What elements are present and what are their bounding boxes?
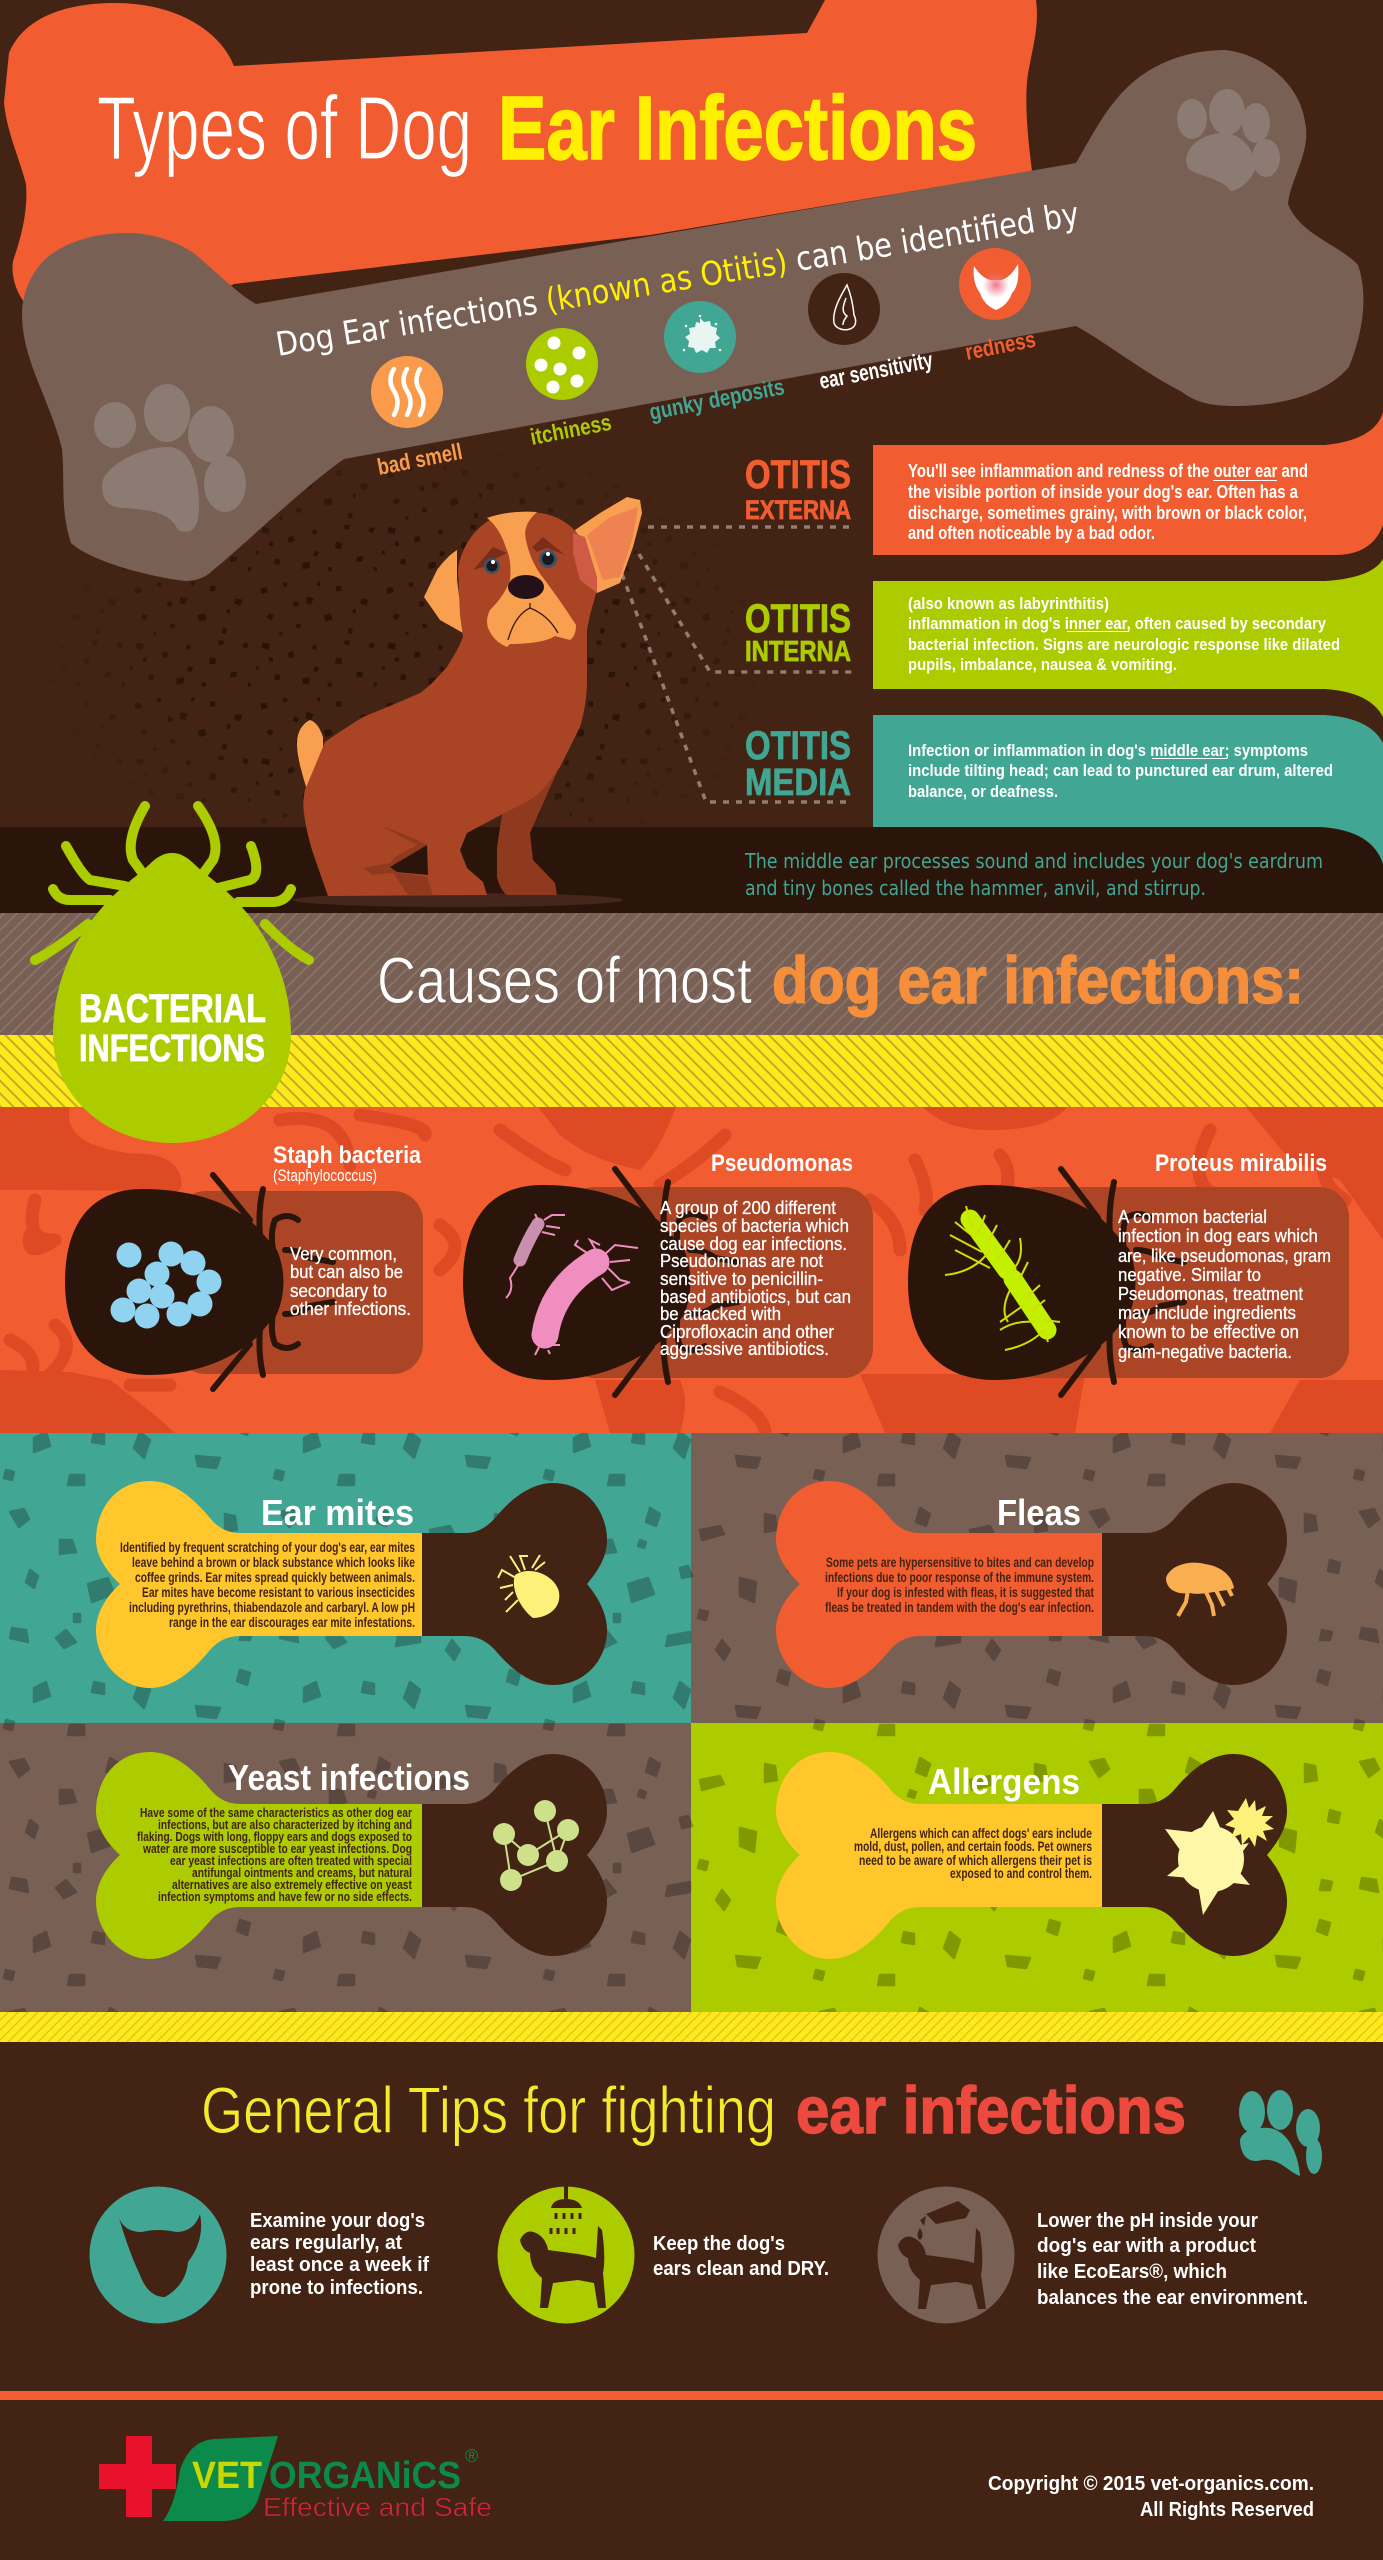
bacteria card: pseudomonas: species of bacteria which <box>660 1216 849 1236</box>
bacteria card: pseudomonas: A group of 200 different <box>660 1198 836 1218</box>
panel: ear mites: range in the ear discourages ear mite infestations. <box>169 1614 415 1630</box>
bacteria card: proteus mirabilis: Pseudomonas, treatment <box>1118 1284 1303 1304</box>
causes heading: Causes of most <box>377 943 752 1017</box>
panel: ear mites: Identified by frequent scratching of your dog's ear, ear mites <box>120 1539 415 1555</box>
bacteria card: staph: secondary to <box>290 1281 387 1301</box>
bacteria card: pseudomonas: Pseudomonas are not <box>660 1251 823 1271</box>
tick legs: proteus <box>1061 1169 1184 1395</box>
otitis media label <box>745 724 851 804</box>
symptom labels: bad smell <box>375 438 464 480</box>
panel: fleas: infections due to poor response of the immune system. <box>825 1569 1094 1585</box>
speckled background around dog <box>86 466 730 825</box>
panel: allergens: Allergens <box>928 1761 1080 1802</box>
bacteria card: proteus mirabilis: Proteus mirabilis <box>1155 1150 1327 1177</box>
panel: otitis media background <box>873 715 1383 870</box>
panel: fleas: If your dog is infested with fleas, it is suggested that <box>837 1584 1094 1600</box>
panel: ear mites: including pyrethrins, thiabendazole and carbaryl. A low pH <box>129 1599 415 1615</box>
panel: bacterial causes <box>0 1107 1383 1433</box>
tick legs: staph <box>213 1175 333 1389</box>
panel: allergens: exposed to and control them. <box>950 1865 1092 1881</box>
dotted leader lines <box>622 527 855 802</box>
background tick silhouettes <box>0 1107 1383 1433</box>
bacteria card: pseudomonas: aggressive antibiotics. <box>660 1339 829 1359</box>
panel: otitis externa background <box>873 412 1383 555</box>
copyright: Copyright © 2015 vet-organics.com. <box>988 2473 1314 2495</box>
tip 2: clean and dry: ears clean and DRY. <box>653 2258 829 2280</box>
bacteria card: pseudomonas: sensitive to penicillin- <box>660 1269 823 1289</box>
logo: Vet Organics: ORGANiCS <box>269 2455 461 2497</box>
dog illustration <box>293 497 642 907</box>
tip 3: lower the pH: Lower the pH inside your <box>1037 2210 1258 2232</box>
tip 3: lower the pH: dog's ear with a product <box>1037 2235 1256 2257</box>
symptom labels <box>375 326 1038 480</box>
bacteria card: proteus mirabilis: known to be effective on <box>1118 1322 1299 1342</box>
title: Ear Infections <box>498 79 977 179</box>
otitis media text: include tilting head; can lead to punctured ear drum, altered <box>908 761 1333 780</box>
logo: Vet Organics <box>99 2436 492 2522</box>
bacteria card: staph: but can also be <box>290 1262 403 1282</box>
tip 1: examine ears <box>90 2186 429 2324</box>
otitis externa text <box>908 461 1308 543</box>
bacteria card: proteus mirabilis: infection in dog ears which <box>1118 1226 1318 1246</box>
icon: bad smell <box>371 356 443 428</box>
bacteria card: pseudomonas: Ciprofloxacin and other <box>660 1322 834 1342</box>
tip 1: examine ears: prone to infections. <box>250 2277 423 2299</box>
dark floor band <box>0 827 1383 913</box>
panel: fleas: fleas be treated in tandem with the dog's ear infection. <box>825 1599 1094 1615</box>
panel: yeast infections: Yeast infections <box>228 1757 470 1798</box>
bone subtitle: Dog Ear infections (known as Otitis) can be identified by <box>273 194 1082 364</box>
tip 3: lower the pH: like EcoEars®, which <box>1037 2261 1227 2283</box>
otitis externa text: the visible portion of inside your dog's ear. Often has a <box>908 482 1299 502</box>
otitis externa label <box>745 453 851 525</box>
bacteria card: pseudomonas: based antibiotics, but can <box>660 1287 851 1307</box>
grey bone <box>22 50 1363 581</box>
icon: gunky deposits <box>664 301 736 373</box>
otitis externa text: discharge, sometimes grainy, with brown or black color, <box>908 503 1307 523</box>
otitis externa text: You'll see inflammation and redness of the outer ear and <box>908 461 1308 481</box>
logo: Vet Organics: VET <box>192 2455 262 2497</box>
tip 1: examine ears: Examine your dog's <box>250 2210 425 2232</box>
tip 3: lower the pH <box>878 2186 1308 2324</box>
middle ear note: and tiny bones called the hammer, anvil, and stirrup. <box>745 876 1206 900</box>
tip 1: examine ears: least once a week if <box>250 2254 429 2276</box>
paw print left <box>94 384 246 532</box>
otitis externa label: EXTERNA <box>745 495 851 525</box>
bacteria card: proteus mirabilis: gram-negative bacteria. <box>1118 1342 1292 1362</box>
otitis media label: OTITIS <box>745 724 851 768</box>
icon: teal paw <box>1239 2090 1322 2176</box>
panel: yeast infections: antifungal ointments and creams, but natural <box>192 1865 412 1880</box>
panel: ear mites: Ear mites have become resistant to various insecticides <box>142 1584 415 1600</box>
yellow striped band lower <box>0 2012 1383 2042</box>
panel: yeast infections: ear yeast infections are often treated with special <box>170 1853 412 1868</box>
causes heading: dog ear infections: <box>772 943 1304 1017</box>
symptom labels: redness <box>963 326 1038 365</box>
tip 2: clean and dry <box>498 2186 829 2324</box>
bacteria card: proteus mirabilis: A common bacterial <box>1118 1207 1267 1227</box>
symptom labels: gunky deposits <box>647 373 786 425</box>
bacteria card: pseudomonas: cause dog ear infections. <box>660 1234 847 1254</box>
panel: fleas <box>691 1433 1383 1723</box>
panel: fleas: Fleas <box>997 1492 1081 1533</box>
icon: redness <box>959 248 1031 320</box>
otitis interna label: INTERNA <box>745 636 851 668</box>
bacteria card: staph <box>65 1142 423 1389</box>
logo: Vet Organics: Effective and Safe <box>263 2492 492 2522</box>
causes heading <box>377 943 1304 1017</box>
otitis interna text <box>908 594 1340 674</box>
tip 2: clean and dry: Keep the dog's <box>653 2233 785 2255</box>
copyright: All Rights Reserved <box>1140 2499 1314 2521</box>
logo: Vet Organics: ® <box>465 2446 478 2466</box>
panel: fleas: Some pets are hypersensitive to bites and can develop <box>826 1554 1094 1570</box>
bacteria card: pseudomonas: be attacked with <box>660 1304 781 1324</box>
bacteria card: staph: other infections. <box>290 1299 411 1319</box>
otitis interna text: pupils, imbalance, nausea & vomiting. <box>908 655 1177 674</box>
panel: yeast infections: alternatives are also extremely effective on yeast <box>172 1877 413 1892</box>
symptom labels: ear sensitivity <box>817 346 935 394</box>
paw print right <box>1177 89 1280 191</box>
causes heading band <box>0 913 1383 1035</box>
panel: yeast infections <box>0 1723 691 2012</box>
panel: ear mites: coffee grinds. Ear mites spread quickly between animals. <box>135 1569 415 1585</box>
tick legs: pseudomonas <box>615 1169 738 1395</box>
symptom labels: itchiness <box>528 409 613 450</box>
otitis externa label: OTITIS <box>745 453 851 497</box>
panel: ear mites <box>0 1433 691 1723</box>
panel: allergens: need to be aware of which allergens their pet is <box>859 1852 1092 1868</box>
otitis externa text: and often noticeable by a bad odor. <box>908 523 1155 543</box>
copyright <box>988 2473 1314 2521</box>
tips heading: ear infections <box>796 2073 1186 2147</box>
panel: allergens: Allergens which can affect dogs' ears include <box>870 1825 1092 1841</box>
bacteria card: pseudomonas <box>463 1150 873 1395</box>
title <box>97 79 977 179</box>
middle ear note <box>744 849 1323 900</box>
otitis media text <box>908 741 1333 801</box>
panel: allergens <box>691 1723 1383 2012</box>
yellow striped band <box>0 1035 1383 1107</box>
orange divider <box>0 2391 1383 2400</box>
otitis media text: balance, or deafness. <box>908 782 1058 801</box>
bacteria card: pseudomonas: Pseudomonas <box>711 1150 853 1177</box>
tip 3: lower the pH: balances the ear environment. <box>1037 2287 1308 2309</box>
otitis media label: MEDIA <box>745 762 851 804</box>
lime tick: bacterial infections <box>35 806 309 1143</box>
panel: yeast infections: water are more susceptible to ear yeast infections. Dog <box>142 1841 412 1856</box>
icon: ear sensitivity <box>808 273 880 345</box>
panel: allergens: mold, dust, pollen, and certain foods. Pet owners <box>854 1838 1092 1854</box>
bacteria card: staph: Very common, <box>290 1244 397 1264</box>
lime tick: bacterial infections: INFECTIONS <box>79 1028 265 1070</box>
panel: yeast infections: Have some of the same characteristics as other dog ear <box>140 1805 412 1820</box>
title: Types of Dog <box>97 79 472 179</box>
otitis interna text: (also known as labyrinthitis) <box>908 594 1109 613</box>
bacteria card: proteus mirabilis <box>908 1150 1349 1395</box>
bacteria card: staph: (Staphylococcus) <box>273 1166 377 1185</box>
panel: yeast infections: infection symptoms and have few or no side effects. <box>158 1889 412 1904</box>
bacteria card: staph: Staph bacteria <box>273 1142 422 1169</box>
otitis interna label <box>745 597 851 668</box>
lime tick: bacterial infections: BACTERIAL <box>79 987 266 1031</box>
panel: ear mites: Ear mites <box>261 1492 414 1533</box>
bacteria card: proteus mirabilis: may include ingredients <box>1118 1303 1296 1323</box>
panel: otitis interna background <box>873 559 1383 717</box>
icon: itchiness <box>526 328 598 400</box>
otitis media text: Infection or inflammation in dog's middle ear; symptoms <box>908 741 1308 760</box>
bacteria card: proteus mirabilis: are, like pseudomonas, gram <box>1118 1246 1331 1266</box>
panel: yeast infections: infections, but are also characterized by itching and <box>158 1817 412 1832</box>
bacteria card: proteus mirabilis: negative. Similar to <box>1118 1265 1261 1285</box>
divider curve under interna <box>873 689 1383 750</box>
orange bone title banner <box>4 0 1037 310</box>
panel: yeast infections: flaking. Dogs with long, floppy ears and dogs exposed to <box>137 1829 412 1844</box>
tip 1: examine ears: ears regularly, at <box>250 2232 402 2254</box>
tips heading: General Tips for fighting <box>201 2073 776 2147</box>
otitis interna text: inflammation in dog's inner ear, often caused by secondary <box>908 614 1326 633</box>
panel: ear mites: leave behind a brown or black substance which looks like <box>132 1554 415 1570</box>
otitis interna label: OTITIS <box>745 597 851 641</box>
